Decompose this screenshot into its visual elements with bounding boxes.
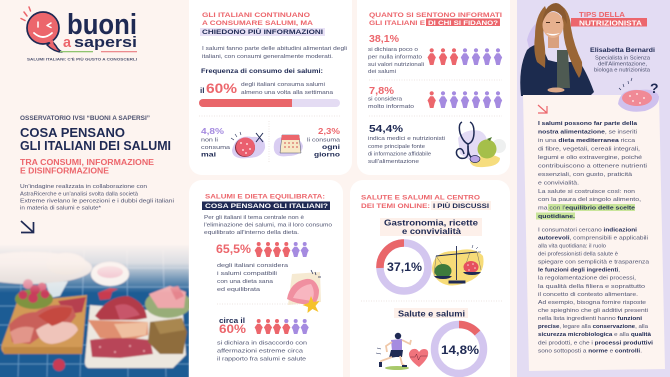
stat: 4,8%: non li xyxy=(201,138,218,144)
author caption: Specialista in Scienza xyxy=(595,56,650,62)
heading: NUTRIZIONISTA xyxy=(579,18,643,28)
subheading: Frequenza di consumo dei salumi: xyxy=(201,68,323,75)
stat: 38,1%: dei salumi xyxy=(368,69,396,75)
text: disagreement xyxy=(217,340,307,362)
stat: 2,3% xyxy=(307,126,341,158)
tips paragraph 1: quotidiane. xyxy=(538,214,576,220)
intro text xyxy=(20,184,174,212)
tips paragraph 1: essenziali, con gusto, praticità xyxy=(538,172,633,178)
text: disagreement: si dichiara in disaccordo con xyxy=(217,340,307,346)
heading: COSA PENSANO GLI ITALIANI? xyxy=(205,203,328,210)
stat: 2,3%: ogni xyxy=(322,144,340,151)
stat: 38,1%: 38,1% xyxy=(369,33,400,45)
heading: SALUTE E SALUMI AL CENTRO xyxy=(361,194,480,202)
stat: 7,8%: molto informato xyxy=(368,104,414,110)
stat: 7,8%: si considera xyxy=(368,96,403,102)
icon: calendar xyxy=(274,135,303,156)
icon: runner and heart xyxy=(376,333,428,370)
arrow xyxy=(538,105,547,113)
stat: 60%: degli italiani consuma salumi xyxy=(241,82,325,88)
tips paragraph 2: che spieghino che gli additivi presenti xyxy=(538,308,648,314)
icon: scale xyxy=(432,245,484,286)
arrow xyxy=(21,221,34,232)
logo: buoni a sapersi xyxy=(21,7,137,62)
tips paragraph 2: spiegare con semplicità e trasparenza xyxy=(538,260,650,266)
stat: circa il 60%: 60% xyxy=(219,324,246,336)
subheading: gastronomy: Gastronomia, ricette xyxy=(384,218,479,228)
tips paragraph 2: la qualità della filiera e soprattutto xyxy=(538,284,645,290)
title block: GLI ITALIANI DEI SALUMI xyxy=(20,139,171,153)
author caption xyxy=(590,47,655,74)
tips paragraph 2: I consumatori cercano indicazioni xyxy=(538,227,638,233)
heading: GLI ITALIANI E xyxy=(369,20,426,27)
stat: 60%: almeno una volta alla settimana xyxy=(241,90,334,96)
stat: 38,1%: per nulla informato xyxy=(368,54,422,60)
subheading: health: Salute e salumi xyxy=(398,310,465,318)
text: compatible: ed equilibrata xyxy=(217,287,261,293)
icon: salami slice: ? xyxy=(650,80,659,96)
intro xyxy=(204,215,332,236)
intro text: AstraRicerche e un'analisi svolta dalla società xyxy=(20,192,139,198)
pictogram: 3 of 7 xyxy=(428,48,502,65)
icon: salami slice xyxy=(618,78,659,112)
tips paragraph 1: legumi e olio extravergine, poiché xyxy=(538,155,642,161)
intro: italiani, con consumi generalmente moderati. xyxy=(202,54,334,60)
tips paragraph 2: dei prodotti, e che i processi produttivi xyxy=(538,340,654,346)
stat: 2,3%: giorno xyxy=(314,152,340,158)
intro xyxy=(202,46,347,60)
icon: winking speech bubble xyxy=(21,7,62,52)
text: disagreement: il rapporto fra salumi e salute xyxy=(217,356,306,362)
logo: buoni a sapersi: sapersi xyxy=(74,34,137,51)
stat: 54,4%: 54,4% xyxy=(369,123,404,135)
subheading: gastronomy: e convivialità xyxy=(402,227,462,236)
heading: GLI ITALIANI CONTINUANO xyxy=(202,12,310,19)
author caption: Elisabetta Bernardi xyxy=(590,47,655,54)
text: compatible: i salumi compatibili xyxy=(217,271,277,277)
title block: OSSERVATORIO IVSI “BUONI A SAPERSI” xyxy=(20,116,150,122)
stat: 38,1% xyxy=(368,33,424,75)
intro: Per gli italiani il tema centrale non è xyxy=(204,215,304,221)
stat: 38,1%: si dichiara poco o xyxy=(368,47,418,53)
icon: ham slice xyxy=(287,270,321,313)
intro: equilibrato all'interno della dieta. xyxy=(204,230,300,236)
tips paragraph 1: di fibre, vegetali, cereali integrali, xyxy=(538,146,641,152)
heading: QUANTO SI SENTONO INFORMATI xyxy=(369,12,502,19)
stat: 54,4%: come principale fonte xyxy=(368,144,425,150)
subheading: gastronomy xyxy=(380,218,482,236)
stat: 7,8%: 7,8% xyxy=(369,85,395,97)
heading xyxy=(200,12,325,36)
stat: 4,8%: mai xyxy=(201,152,216,158)
heading: DI CHI SI FIDANO? xyxy=(428,20,498,27)
title block: COSA PENSANO xyxy=(20,126,125,140)
intro text: in materia di salumi e salute* xyxy=(20,206,102,212)
panel: information xyxy=(357,0,510,175)
heading: SALUMI E DIETA EQUILIBRATA: xyxy=(205,194,325,200)
progress bar xyxy=(199,99,340,107)
stat: 54,4%: indica medici e nutrizionisti xyxy=(368,136,445,142)
tips paragraph 1: La salute si costruisce così: non xyxy=(538,189,635,195)
tips paragraph 1 xyxy=(536,121,647,220)
panel: diet xyxy=(189,180,343,377)
heading xyxy=(202,194,330,210)
stat: 4,8%: consuma xyxy=(201,145,231,151)
stat: 2,3%: 2,3% xyxy=(318,126,341,136)
title block: E DISINFORMAZIONE xyxy=(20,166,110,176)
tips paragraph 2: la regolamentazione dei processi, xyxy=(538,276,637,282)
subheading: health xyxy=(394,308,468,318)
donut chart: 14,8% xyxy=(434,324,484,374)
stat: 4,8% xyxy=(201,126,231,158)
pictogram: 60 percent xyxy=(255,319,309,334)
heading xyxy=(361,194,491,210)
donut chart: 37,1% xyxy=(380,243,428,291)
tips paragraph 2: precise , legare alla conservazione , alla xyxy=(538,324,649,330)
tips paragraph 1: I salumi possono far parte della xyxy=(538,121,638,127)
stat: 38,1%: sui valori nutrizionali xyxy=(368,62,424,68)
tips paragraph 2: autorevoli , comprensibili e applicabili xyxy=(538,235,648,241)
stat: circa il 60%: circa il xyxy=(219,318,245,325)
tips paragraph 1: con la paura del singolo alimento, xyxy=(538,197,642,203)
tips paragraph 2: alla vita quotidiana: il ruolo xyxy=(538,243,606,249)
stat: 60%: 60% xyxy=(206,80,238,96)
stat: 7,8% xyxy=(368,85,414,110)
stat: 65,5%: 65,5% xyxy=(216,244,251,256)
panel: online topics xyxy=(350,180,510,377)
intro text: Extreme rivelano le percezioni e i dubbi degli italiani xyxy=(20,198,174,204)
stat: 54,4%: di informazione affidabile xyxy=(368,152,431,158)
author caption: biologa e nutrizionista xyxy=(594,68,650,74)
tips paragraph 1: contribuiscono a ottenere nutrienti xyxy=(538,163,647,169)
panel: nutritionist tips xyxy=(517,0,670,377)
stat: 4,8%: 4,8% xyxy=(201,126,225,136)
stat: 60%: il xyxy=(200,88,205,95)
intro: I salumi fanno parte delle abitudini alimentari degli xyxy=(202,46,347,52)
donut chart: 37,1%: 37,1% xyxy=(387,260,422,274)
tips paragraph 2 xyxy=(538,227,654,354)
heading: CHIEDONO PIÙ INFORMAZIONI xyxy=(202,27,323,36)
tips paragraph 2: nella lista ingredienti hanno funzioni xyxy=(538,316,643,322)
text card xyxy=(523,78,665,371)
tips paragraph 1: nostra alimentazione , se inseriti xyxy=(538,130,637,136)
stat: 54,4% xyxy=(368,123,445,165)
logo: buoni a sapersi: a xyxy=(63,34,72,51)
tips paragraph 2: sicurezza microbiologica e alla qualità xyxy=(538,332,652,338)
heading: I PIÙ DISCUSSI xyxy=(433,201,489,210)
text: disagreement: affermazioni estreme circa xyxy=(217,348,304,354)
logo: buoni a sapersi: buoni xyxy=(67,9,137,41)
panel: consumption xyxy=(189,0,352,175)
heading: TIPS DELLA xyxy=(579,10,626,19)
photo: charcuterie boards xyxy=(0,243,191,377)
title block: TRA CONSUMI, INFORMAZIONE xyxy=(20,158,155,167)
tips paragraph 2: sono sottoposti a norme e controlli . xyxy=(538,348,643,354)
title block xyxy=(20,116,171,176)
tips paragraph 2: dei professionisti della salute è xyxy=(538,252,618,258)
tips paragraph 2: Ad esempio, bisogna fornire risposte xyxy=(538,300,646,306)
heading xyxy=(571,10,647,28)
tips paragraph 1: e convivialità. xyxy=(538,180,580,186)
text: compatible xyxy=(217,263,289,293)
pictogram: 4 of 6 xyxy=(255,242,309,257)
author caption: dell'Alimentazione, xyxy=(598,62,647,68)
intro: l'eliminazione dei salumi, ma il loro consumo xyxy=(204,222,332,228)
text: compatible: con una dieta sana xyxy=(217,279,274,285)
icon: stethoscope and apple xyxy=(456,122,506,167)
donut chart: 14,8%: 14,8% xyxy=(441,343,479,357)
intro text: Un'indagine realizzata in collaborazione con xyxy=(20,184,147,190)
logo: buoni a sapersi: SALUMI ITALIANI: C'È PIÙ GUSTO A CONOSCERLI xyxy=(27,56,137,62)
heading: DEI TEMI ONLINE: xyxy=(361,203,430,210)
stat: 2,3%: li consuma xyxy=(307,138,341,144)
tips paragraph 2: le funzioni degli ingredienti , xyxy=(538,268,620,274)
pictogram: 1 of 7 xyxy=(428,91,502,108)
portrait: Elisabetta Bernardi xyxy=(520,3,594,96)
tips paragraph 1: in una dieta mediterranea ricca xyxy=(538,138,636,144)
stat: circa il 60% xyxy=(219,318,246,336)
stat: 60% xyxy=(200,80,334,96)
tips paragraph 2: il concetto di contesto alimentare. xyxy=(538,292,639,298)
stat: 54,4%: sull'alimentazione xyxy=(368,159,419,165)
text: compatible: degli italiani considera xyxy=(217,263,289,269)
tips paragraph 1: ma con l' equilibrio delle scelte xyxy=(538,206,635,212)
heading: A CONSUMARE SALUMI, MA xyxy=(202,20,313,27)
heading xyxy=(369,12,502,27)
icon: salami crossed xyxy=(231,132,265,158)
